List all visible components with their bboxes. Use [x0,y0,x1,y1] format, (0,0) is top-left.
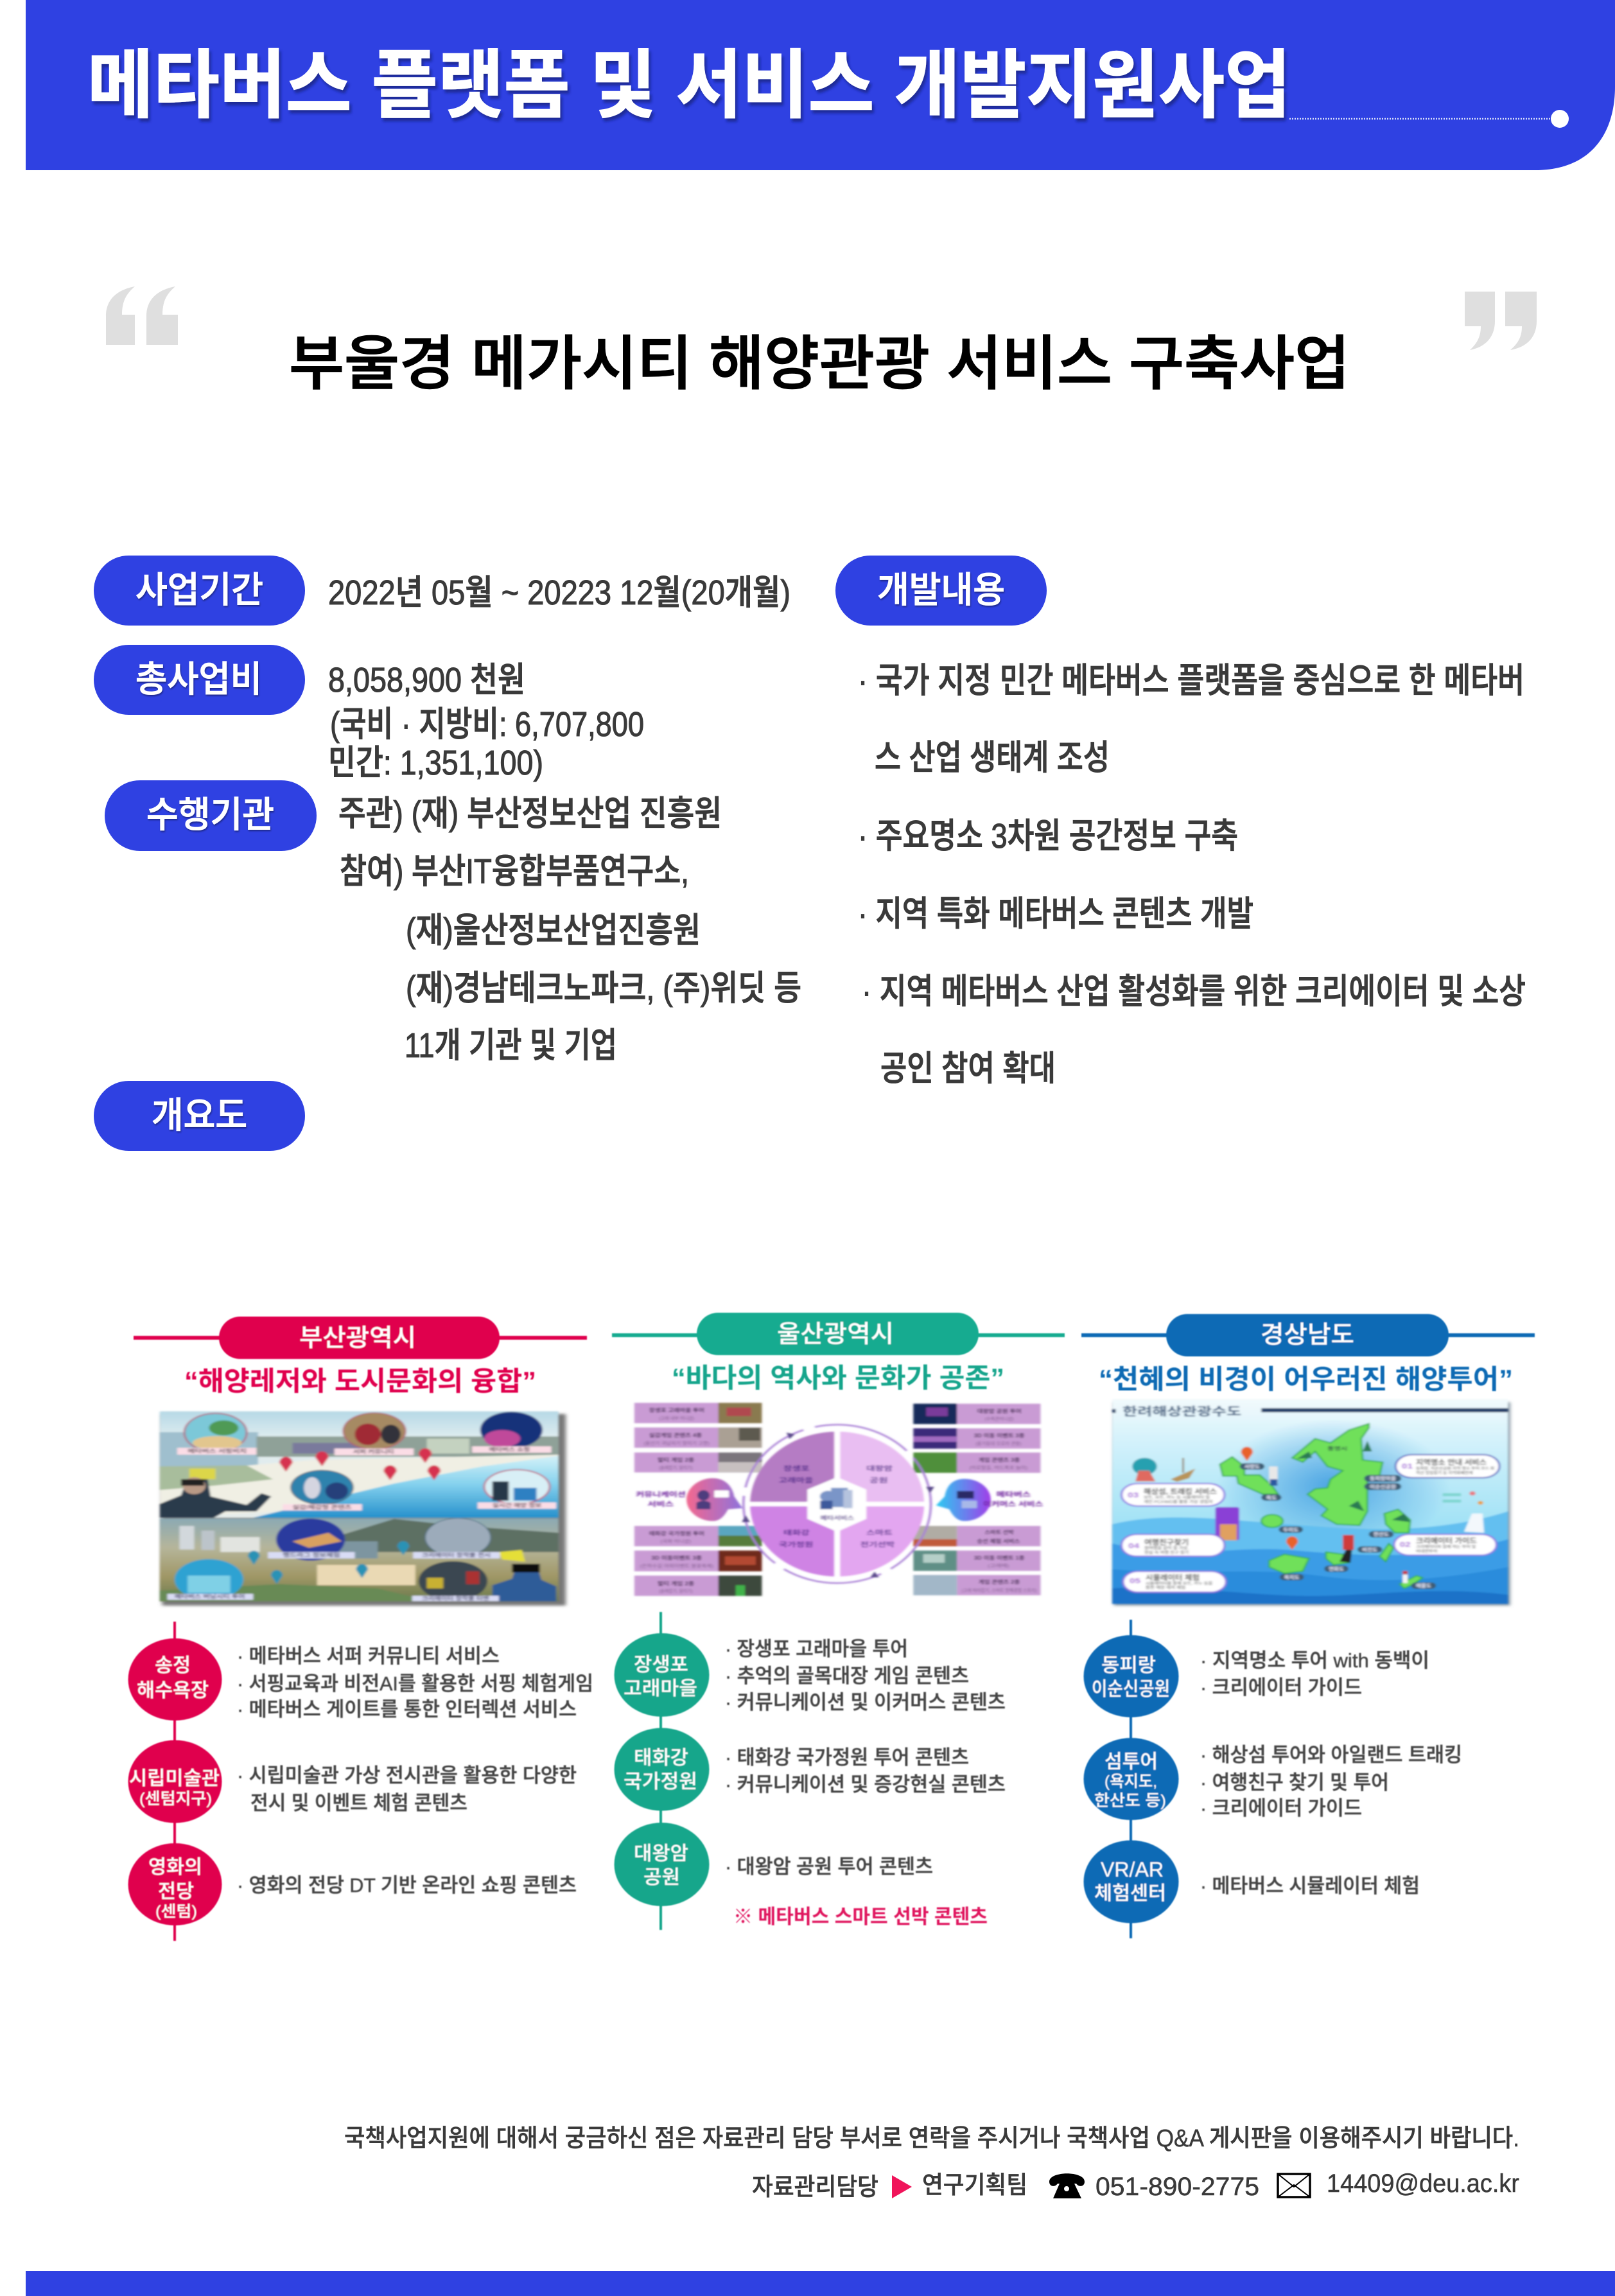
Ulsan four-quadrant circle: 공원 [869,1477,888,1484]
Gyeongnam badge text: 현실 속 여행 친구 찾기 [1144,1550,1189,1555]
Busan illustration captions lower: 크리에이터 창작물 전시 [422,1552,491,1558]
Gyeongnam map labels: 매물도 [1416,1582,1431,1588]
contact details: 14409@deu.ac.kr [1327,2169,1519,2198]
Gyeongnam map labels: 동피랑마을 [1370,1475,1396,1481]
node: 동피랑 이순신공원: 동피랑 [1101,1655,1156,1676]
Gyeongnam service badges [1122,1455,1499,1592]
Gyeongnam service list: · 여행친구 찾기 및 투어 [1200,1771,1389,1794]
Ulsan four-quadrant circle: 메타서비스 [820,1515,854,1521]
node: 영화의 전당: 전당 [158,1881,194,1902]
Ulsan left content rows: (술래잡기, 달리기) [659,1465,693,1470]
Busan slogan: “해양레저와 도시문화의 융합” [184,1366,536,1396]
Gyeongnam service list: · 크리에이터 가이드 [1200,1676,1362,1699]
header banner [26,0,1615,170]
header dotted line and dot [1289,110,1569,128]
Gyeongnam map labels [1240,1446,1436,1589]
Gyeongnam badge text: 크리에이터 가이드 [1416,1537,1477,1545]
Gyeongnam badge text: 해상섬, 트래킹 서비스 [1144,1487,1217,1495]
Gyeongnam badge text: 시뮬레이터 체험 [1146,1573,1200,1581]
node: 시립미술관 [128,1740,222,1823]
Ulsan left content rows: 실감게임 콘텐츠 4종 [649,1432,702,1439]
node: 동피랑 이순신공원: 이순신공원 [1092,1679,1170,1700]
Ulsan right content rows: (수족관미니샵) [984,1416,1014,1421]
Busan header: 부산광역시 [299,1325,416,1352]
subtitle heading: 부울경 메가시티 해양관광 서비스 구축사업 [289,331,1350,397]
icon: envelope [1278,2174,1310,2197]
Gyeongnam badge text: 지역명소 안내 서비스 [1416,1459,1487,1466]
Gyeongnam map labels: 두미도 [1283,1527,1298,1532]
Ulsan left content rows: 장생포 고래마을 투어 [649,1407,704,1414]
icon: opening quote mark [106,286,178,345]
Gyeongnam service list [1200,1649,1462,1897]
label pill: 개요도 [94,1081,305,1151]
budget text: 민간: 1,351,100) [328,744,543,782]
Busan illustration captions lower: 크리에이터 창작물 터맨 [422,1595,489,1602]
node: 섬투어: 한산도 등) [1094,1792,1166,1810]
Gyeongnam map labels: 욕지도 [1284,1575,1300,1580]
Gyeongnam map labels: 연화도 [1329,1566,1344,1572]
label pill: 수행기관 [105,780,317,851]
Gyeongnam badge text: 05 [1130,1577,1140,1584]
contact details: 연구기획팀 [922,2172,1027,2199]
Busan illustration captions lower: 행드라그 정보체험 [283,1552,340,1558]
Gyeongnam header [1081,1314,1535,1356]
node: 장생포 고래마을: 장생포 [634,1654,688,1676]
node: 영화의 전당: (센텀) [155,1903,197,1920]
Ulsan right content rows: (고래떼) [988,1563,1009,1568]
Gyeongnam map title: 한려해상관광수도 [1122,1405,1241,1418]
Gyeongnam badge text: 비대면투어 [1416,1548,1437,1554]
Gyeongnam map labels: 욕도 [1266,1495,1277,1500]
icon: closing quote mark [1465,292,1537,350]
Busan illustration captions: 실감/체감형 콘텐츠 [293,1504,352,1511]
Gyeongnam service list: · 해상섬 투어와 아일랜드 트래킹 [1200,1744,1462,1766]
Ulsan right content rows: (미로탈출, 머드폭포 놀이) [969,1465,1028,1470]
organizations text: 11개 기관 및 기업 [405,1026,617,1065]
Busan service list: 전시 및 이벤트 체험 콘텐츠 [250,1792,467,1814]
node: 장생포 고래마을 [614,1633,709,1717]
Busan service list: · 영화의 전당 DT 기반 온라인 쇼핑 콘텐츠 [237,1874,577,1897]
Ulsan right content rows: (고래 따라잡기, 스마트 항해경험 스토리) [961,1588,1037,1593]
node: 대왕암 공원 [614,1823,709,1906]
organizations text: (재)울산정보산업진흥원 [406,911,701,950]
Ulsan right content rows: 게임 콘텐츠 2종 [979,1579,1020,1585]
Ulsan service list: · 대왕암 공원 투어 콘텐츠 [725,1855,933,1878]
Ulsan four-quadrant circle: 장생포 [783,1465,810,1472]
Gyeongnam map title [1112,1405,1508,1418]
Gyeongnam header: 경상남도 [1261,1322,1354,1349]
Ulsan four-quadrant circle: 대왕암 [866,1465,893,1472]
node: 대왕암 공원: 공원 [643,1867,680,1888]
Ulsan header: 울산광역시 [777,1321,894,1348]
Busan illustration captions [177,1446,556,1511]
Gyeongnam illustration figures [1132,1447,1484,1583]
overview diagram [128,1313,1535,1941]
node: 송정 해수욕장 [128,1638,222,1721]
node: 장생포 고래마을: 고래마을 [624,1678,697,1699]
Ulsan left content rows: (울산기 귀납자기 맞이기 고향) [643,1441,710,1446]
Ulsan header [612,1313,1065,1355]
contact details: 자료관리담당 [752,2174,878,2201]
node: VR/AR 체험센터 [1084,1841,1179,1923]
Busan service list: · 메타버스 서퍼 커뮤니티 서비스 [237,1645,500,1667]
arrow [892,2175,912,2198]
node: 송정 해수욕장: 해수욕장 [137,1680,209,1701]
Gyeongnam slogan: “천혜의 비경이 어우러진 해양투어” [1099,1364,1513,1394]
budget text: (국비 · 지방비: 6,707,800 [330,705,644,744]
Busan illustration captions: 서퍼 커뮤니티 [353,1448,394,1455]
panel: Busan column [128,1317,593,1941]
Gyeongnam badge text: 개인 PC/HMD를 활용 가상 경험자 [1144,1499,1213,1504]
period text: 2022년 05월 ~ 20223 12월(20개월) [328,574,790,612]
Ulsan ring arrows [742,1424,934,1583]
Ulsan e-commerce bubble: 메타버스 [997,1491,1031,1498]
Gyeongnam badge text: 동피랑, 이순신공원 지역 명소 투어 코스 최 [1416,1466,1494,1471]
Ulsan right content rows: 3D 이동 이벤트 1종 [974,1555,1025,1561]
Ulsan service list: · 장생포 고래마을 투어 [725,1638,908,1660]
node: 시립미술관: 시립미술관 [129,1768,220,1789]
Ulsan service list: · 커뮤니케이션 및 증강현실 콘텐츠 [725,1773,1006,1796]
Busan header [134,1317,587,1359]
Ulsan left content rows: 멀티 게임 2종 [658,1580,694,1587]
Gyeongnam service list: · 메타버스 시뮬레이터 체험 [1200,1875,1420,1897]
node: 태화강 국가정원: 태화강 [634,1748,688,1769]
Ulsan service list: · 태화강 국가정원 투어 콘텐츠 [725,1746,969,1769]
Ulsan service list [725,1638,1006,1878]
Ulsan communication bubble: 서비스 [647,1501,674,1508]
Ulsan right content rows: (울기등대 오로라 관찰) [975,1441,1022,1446]
label pill: 사업기간: 사업기간 [135,570,263,610]
Gyeongnam map labels: 비진도 [1362,1547,1377,1552]
Busan service list: · 서핑교육과 비전AI를 활용한 서핑 체험게임 [237,1672,593,1695]
Ulsan service list: · 커뮤니케이션 및 이커머스 콘텐츠 [725,1691,1006,1713]
node: 영화의 전당: 영화의 [148,1857,202,1878]
Ulsan left content rows [634,1403,762,1596]
Gyeongnam badge text: 03 [1128,1491,1139,1499]
Ulsan e-commerce bubble [936,1479,1043,1521]
label pill: 사업기간 [94,556,305,626]
label pill: 총사업비: 총사업비 [135,659,262,699]
Gyeongnam badge text: 04 [1128,1542,1140,1550]
label pill: 수행기관: 수행기관 [146,794,274,835]
node: 섬투어 [1084,1738,1179,1820]
Ulsan four-quadrant circle: 스마트 [866,1529,893,1536]
Busan illustration captions: 메타버스 서핑비치 [188,1448,247,1454]
subtitle block [106,286,1537,397]
development content list: · 지역 특화 메타버스 콘텐츠 개발 [858,895,1253,933]
Gyeongnam map labels: 통영시 [1327,1446,1347,1451]
Gyeongnam service list: · 크리에이터 가이드 [1200,1797,1362,1819]
Busan illustration captions lower: 메타버스 버닝시티 투어 [175,1593,245,1600]
Gyeongnam badge text: 시뮬레이터를 통해 요트, 카누 등을 [1146,1581,1212,1586]
Busan service list: · 메타버스 게이트를 통한 인터렉션 서비스 [237,1698,577,1721]
Busan illustration [160,1412,566,1606]
label pill: 개발내용: 개발내용 [877,570,1005,610]
Ulsan left content rows: (은하수길 야외이벤트 불꽃축제) [640,1563,714,1568]
Gyeongnam map labels: 사량도 [1244,1464,1260,1469]
Ulsan four-quadrant circle [750,1432,924,1577]
Ulsan four-quadrant circle: 국가정원 [779,1541,813,1548]
node: 태화강 국가정원 [614,1728,709,1811]
contact details [752,2169,1519,2201]
Ulsan right content rows [913,1404,1040,1595]
Ulsan communication bubble [636,1478,742,1521]
label pill: 개요도: 개요도 [152,1095,247,1135]
development content list: 공인 참여 확대 [880,1049,1056,1088]
Ulsan left content rows: 3D 이동이벤트 3종 [651,1555,702,1561]
smart vessel note: ※ 메타버스 스마트 선박 콘텐츠 [733,1906,988,1928]
organizations text: (재)경남테크노파크, (주)위딧 등 [406,969,801,1008]
contact notice: 국책사업지원에 대해서 궁금하신 점은 자료관리 담당 부서로 연락을 주시거나 국책사업 Q&A 게시판을 이용해주시기 바랍니다. [344,2125,1519,2152]
budget text: 8,058,900 천원 [328,661,525,699]
panel: Ulsan column [612,1313,1065,1930]
Ulsan e-commerce bubble: 이커머스 서비스 [983,1501,1043,1508]
Gyeongnam timeline nodes [1084,1620,1179,1938]
Gyeongnam badge text: 통한 해양 레저 체험 [1146,1584,1185,1590]
Busan illustration captions lower [168,1552,500,1602]
node: 대왕암 공원: 대왕암 [634,1843,688,1864]
Ulsan four-quadrant circle: 고래마을 [779,1477,813,1484]
Ulsan right content rows: 대왕암 공원 투어 [977,1408,1022,1414]
development content list [858,662,1526,1088]
node: 시립미술관: (센텀지구) [139,1790,212,1808]
node: 동피랑 이순신공원 [1084,1635,1179,1717]
Gyeongnam badge text [1128,1459,1494,1590]
Ulsan timeline nodes [614,1612,709,1930]
development content list: · 주요명소 3차원 공간정보 구축 [858,817,1238,855]
Gyeongnam service list: · 지역명소 투어 with 동백이 [1200,1649,1429,1672]
Ulsan right content rows: 스마트 선박 [984,1529,1014,1536]
node: 태화강 국가정원: 국가정원 [624,1771,697,1792]
Busan illustration captions: 실시간 해양 정보 [493,1502,542,1509]
Ulsan four-quadrant circle: 전기선박 [860,1541,895,1548]
label pill: 총사업비 [94,645,305,715]
Ulsan slogan: “바다의 역사와 문화가 공존” [672,1363,1004,1393]
icon: telephone [1049,2173,1085,2198]
Gyeongnam map labels: 한산도 [1374,1531,1389,1537]
Gyeongnam badge text: 크리에이터와 함께 하는 투어 및 [1416,1544,1476,1549]
Busan service list: · 시립미술관 가상 전시관을 활용한 다양한 [237,1764,577,1787]
organizations text [338,794,801,1065]
Busan illustration captions: 메타버스 쇼핑 [489,1446,530,1453]
Gyeongnam badge text: 02 [1400,1541,1411,1548]
icon: metaverse center [820,1488,853,1509]
node: 송정 해수욕장: 송정 [155,1655,191,1676]
Ulsan left content rows: (고래 내부 미니샵) [659,1415,694,1421]
Ulsan communication bubble: 커뮤니케이션 [636,1491,686,1498]
Gyeongnam badge text: 여행친구찾기 [1144,1538,1189,1546]
Busan service list [237,1645,593,1897]
Ulsan four-quadrant circle: 태화강 [783,1529,810,1536]
title: 메타버스 플랫폼 및 서비스 개발지원사업 [87,44,1291,127]
Ulsan left content rows: 멀티 게임 2종 [658,1457,694,1463]
node: VR/AR 체험센터: 체험센터 [1094,1883,1166,1904]
node: 섬투어: (욕지도, [1104,1773,1157,1791]
Ulsan right content rows: 승선 체험 서비스 [977,1538,1020,1545]
budget text [328,661,644,782]
contact details: 051-890-2775 [1096,2173,1259,2201]
Ulsan left content rows: 태화강 국가정원 투어 [649,1530,704,1537]
organizations text: 참여) 부산IT융합부품연구소, [340,852,689,891]
Gyeongnam badge text: 적선 맛집찾기 등 지역화폐연계 [1416,1470,1473,1475]
node: VR/AR 체험센터: VR/AR [1101,1858,1164,1881]
Ulsan left content rows: (술래잡기, 달리기) [659,1588,693,1593]
development content list: 스 산업 생태계 조성 [875,739,1110,777]
Gyeongnam island map [1220,1424,1422,1588]
Gyeongnam badge text: 참여멤을 같이 할 가상, [1144,1545,1189,1550]
Ulsan diagram [634,1403,1043,1596]
node: 영화의 전당 [128,1843,222,1925]
Gyeongnam badge text: 01 [1402,1462,1413,1470]
Busan timeline nodes [128,1622,222,1941]
Gyeongnam illustration [1112,1399,1510,1606]
label pill: 개발내용 [835,556,1047,626]
panel: Gyeongnam column [1081,1314,1535,1938]
organizations text: 주관) (재) 부산정보산업 진흥원 [338,794,722,833]
Ulsan right content rows: 게임 콘텐츠 3종 [979,1457,1020,1463]
Gyeongnam map labels: 이순신공원 [1370,1484,1396,1489]
Ulsan right content rows: 3D 이동 이벤트 3종 [974,1433,1025,1439]
node: 섬투어: 섬투어 [1104,1751,1158,1773]
Ulsan service list: · 추억의 골목대장 게임 콘텐츠 [725,1665,969,1687]
Gyeongnam badge text: 보트, 요트, 카누 등 시뮬레이터 및 [1144,1494,1210,1500]
footer bar [26,2271,1615,2296]
Ulsan left content rows: (국화 미니샵) [661,1538,692,1544]
